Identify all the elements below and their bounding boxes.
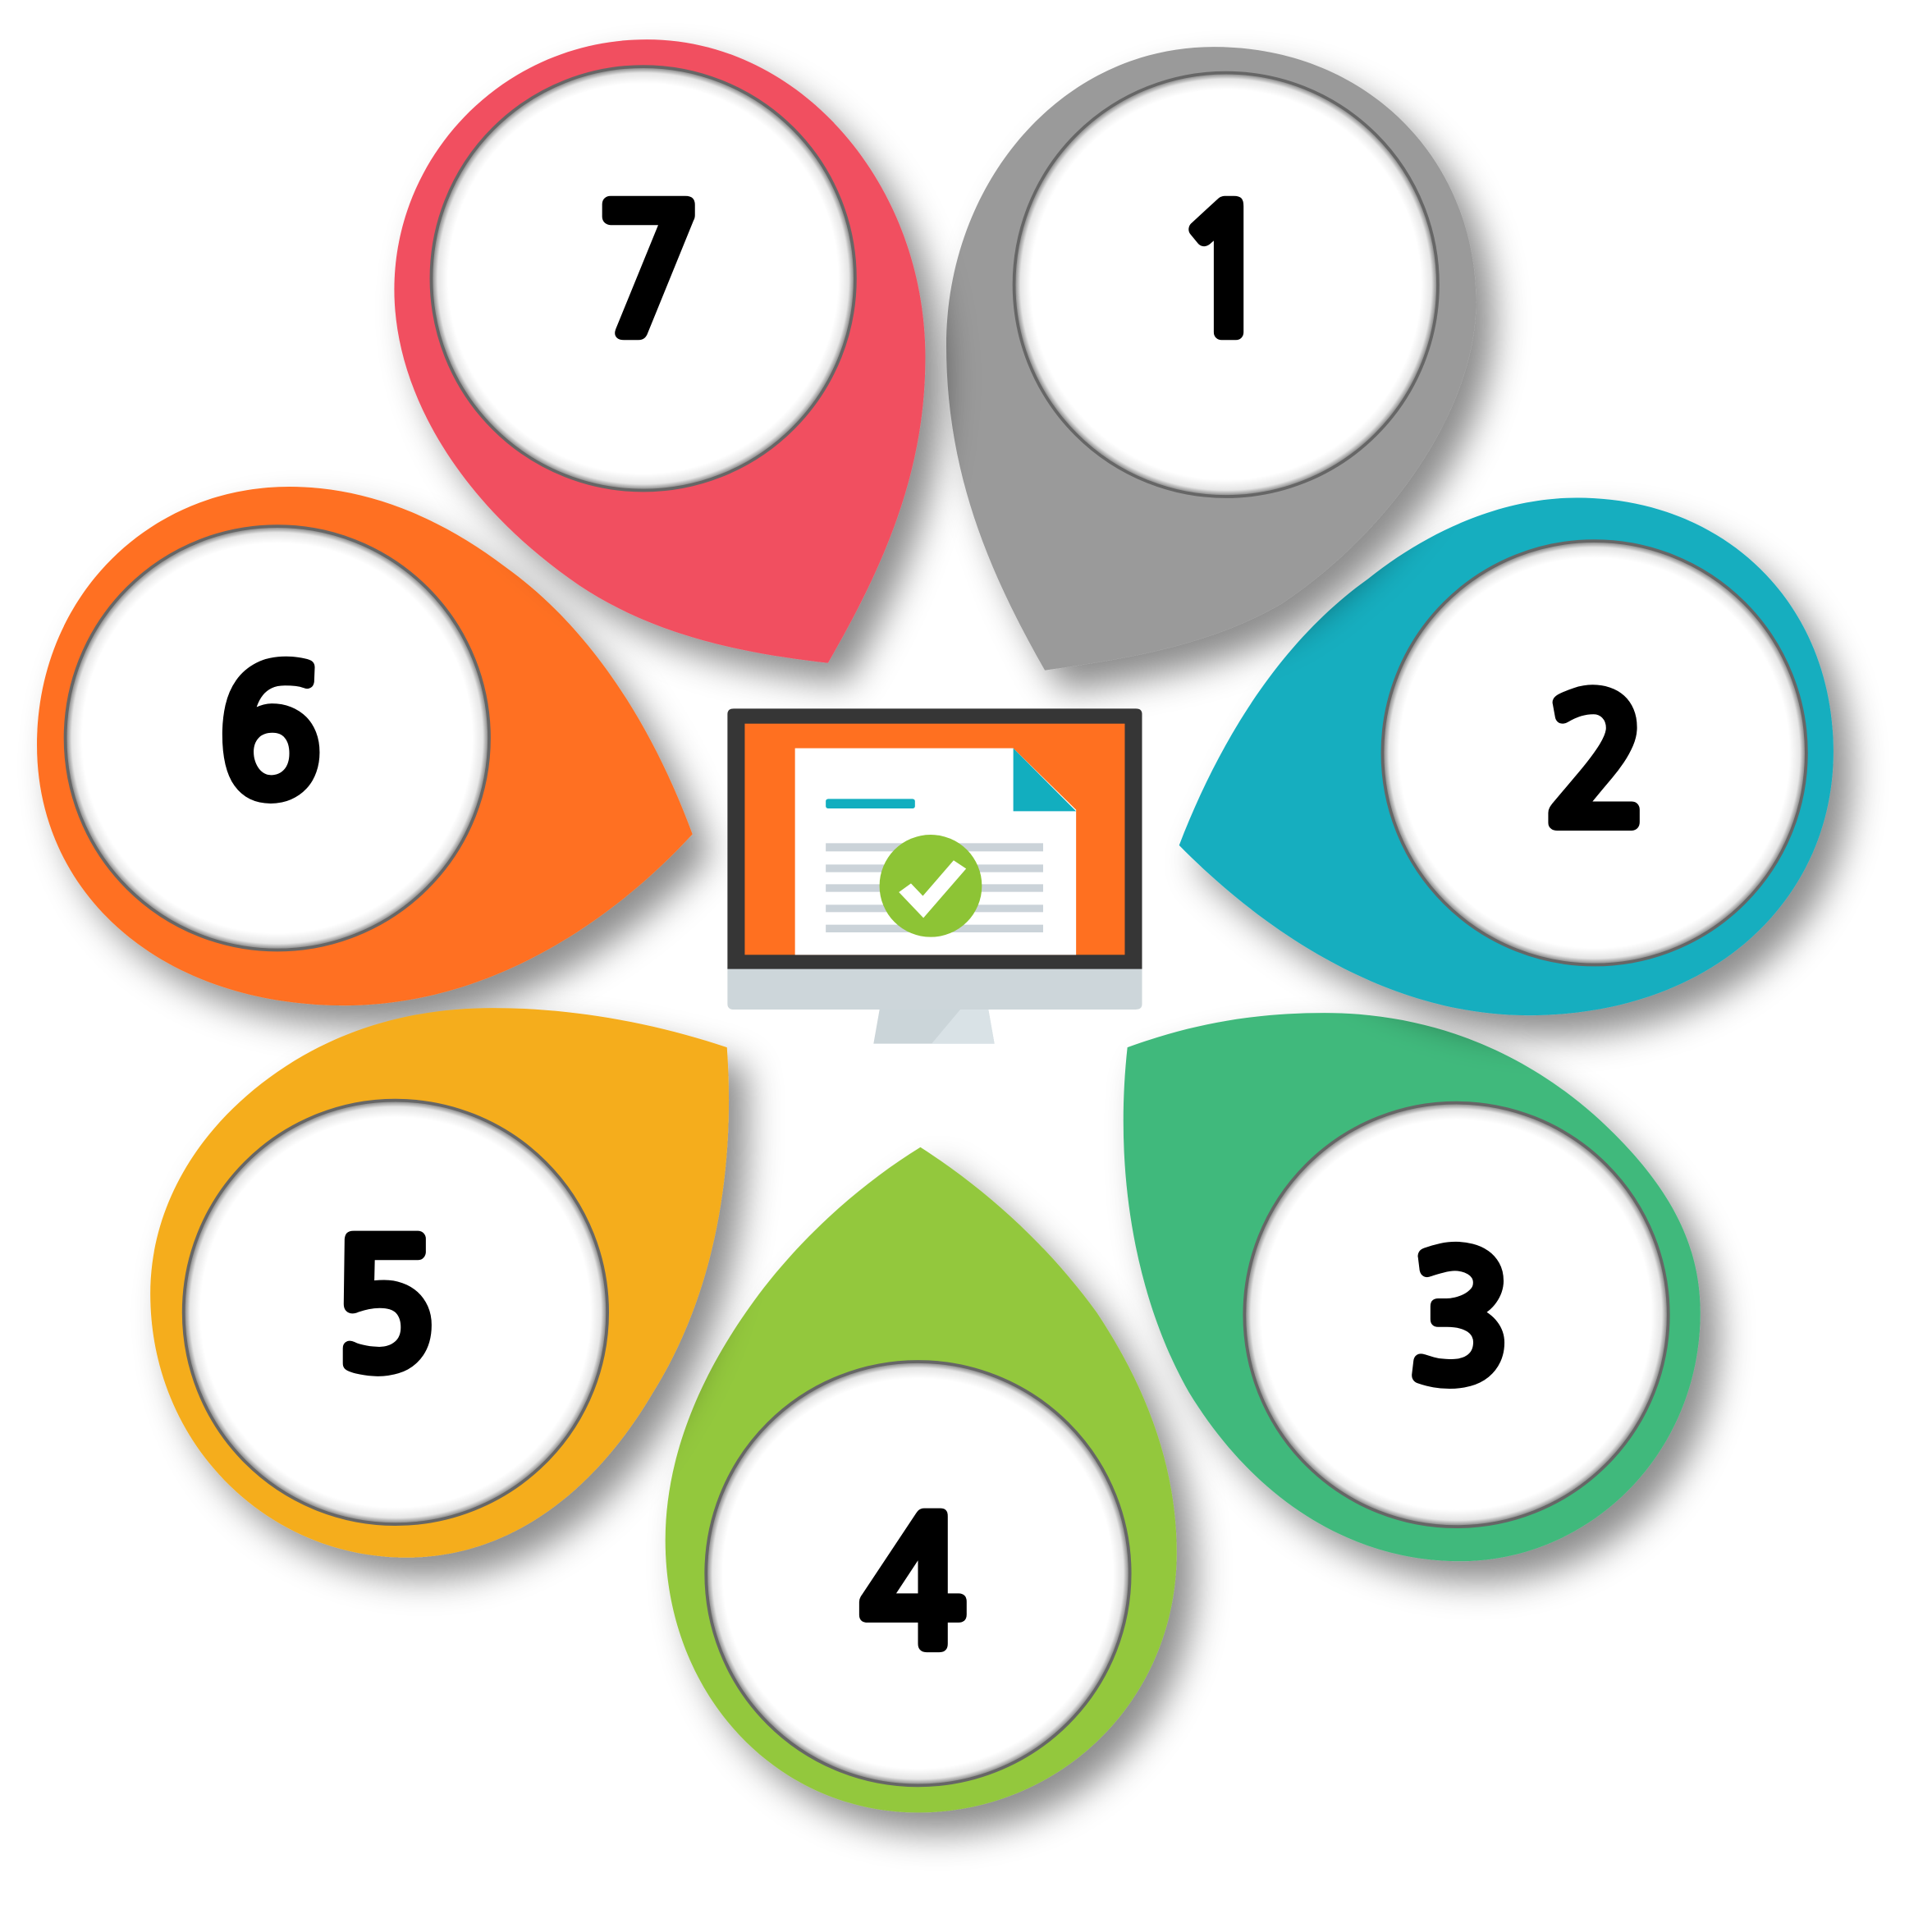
pin 3: green (1124, 1013, 1701, 1561)
pin 1: gray: 1 (1172, 187, 1278, 360)
pin 3: green: 3 (1407, 1234, 1513, 1408)
pin 7: red: 7 (597, 187, 703, 360)
pin 2: teal (1179, 498, 1834, 1015)
pin 6: orange: 6 (217, 649, 323, 822)
pin 7: red (394, 39, 925, 663)
icon: monitor with approved document (727, 708, 1142, 1044)
pin 4: lime: 4 (860, 1500, 966, 1673)
pin 2: teal: 2 (1544, 677, 1650, 850)
pin 4: lime (666, 1147, 1177, 1812)
pin 6: orange (37, 487, 693, 1005)
pin 1: gray (946, 47, 1476, 671)
pin 5: amber (150, 1008, 729, 1558)
pin 5: amber: 5 (332, 1222, 437, 1395)
